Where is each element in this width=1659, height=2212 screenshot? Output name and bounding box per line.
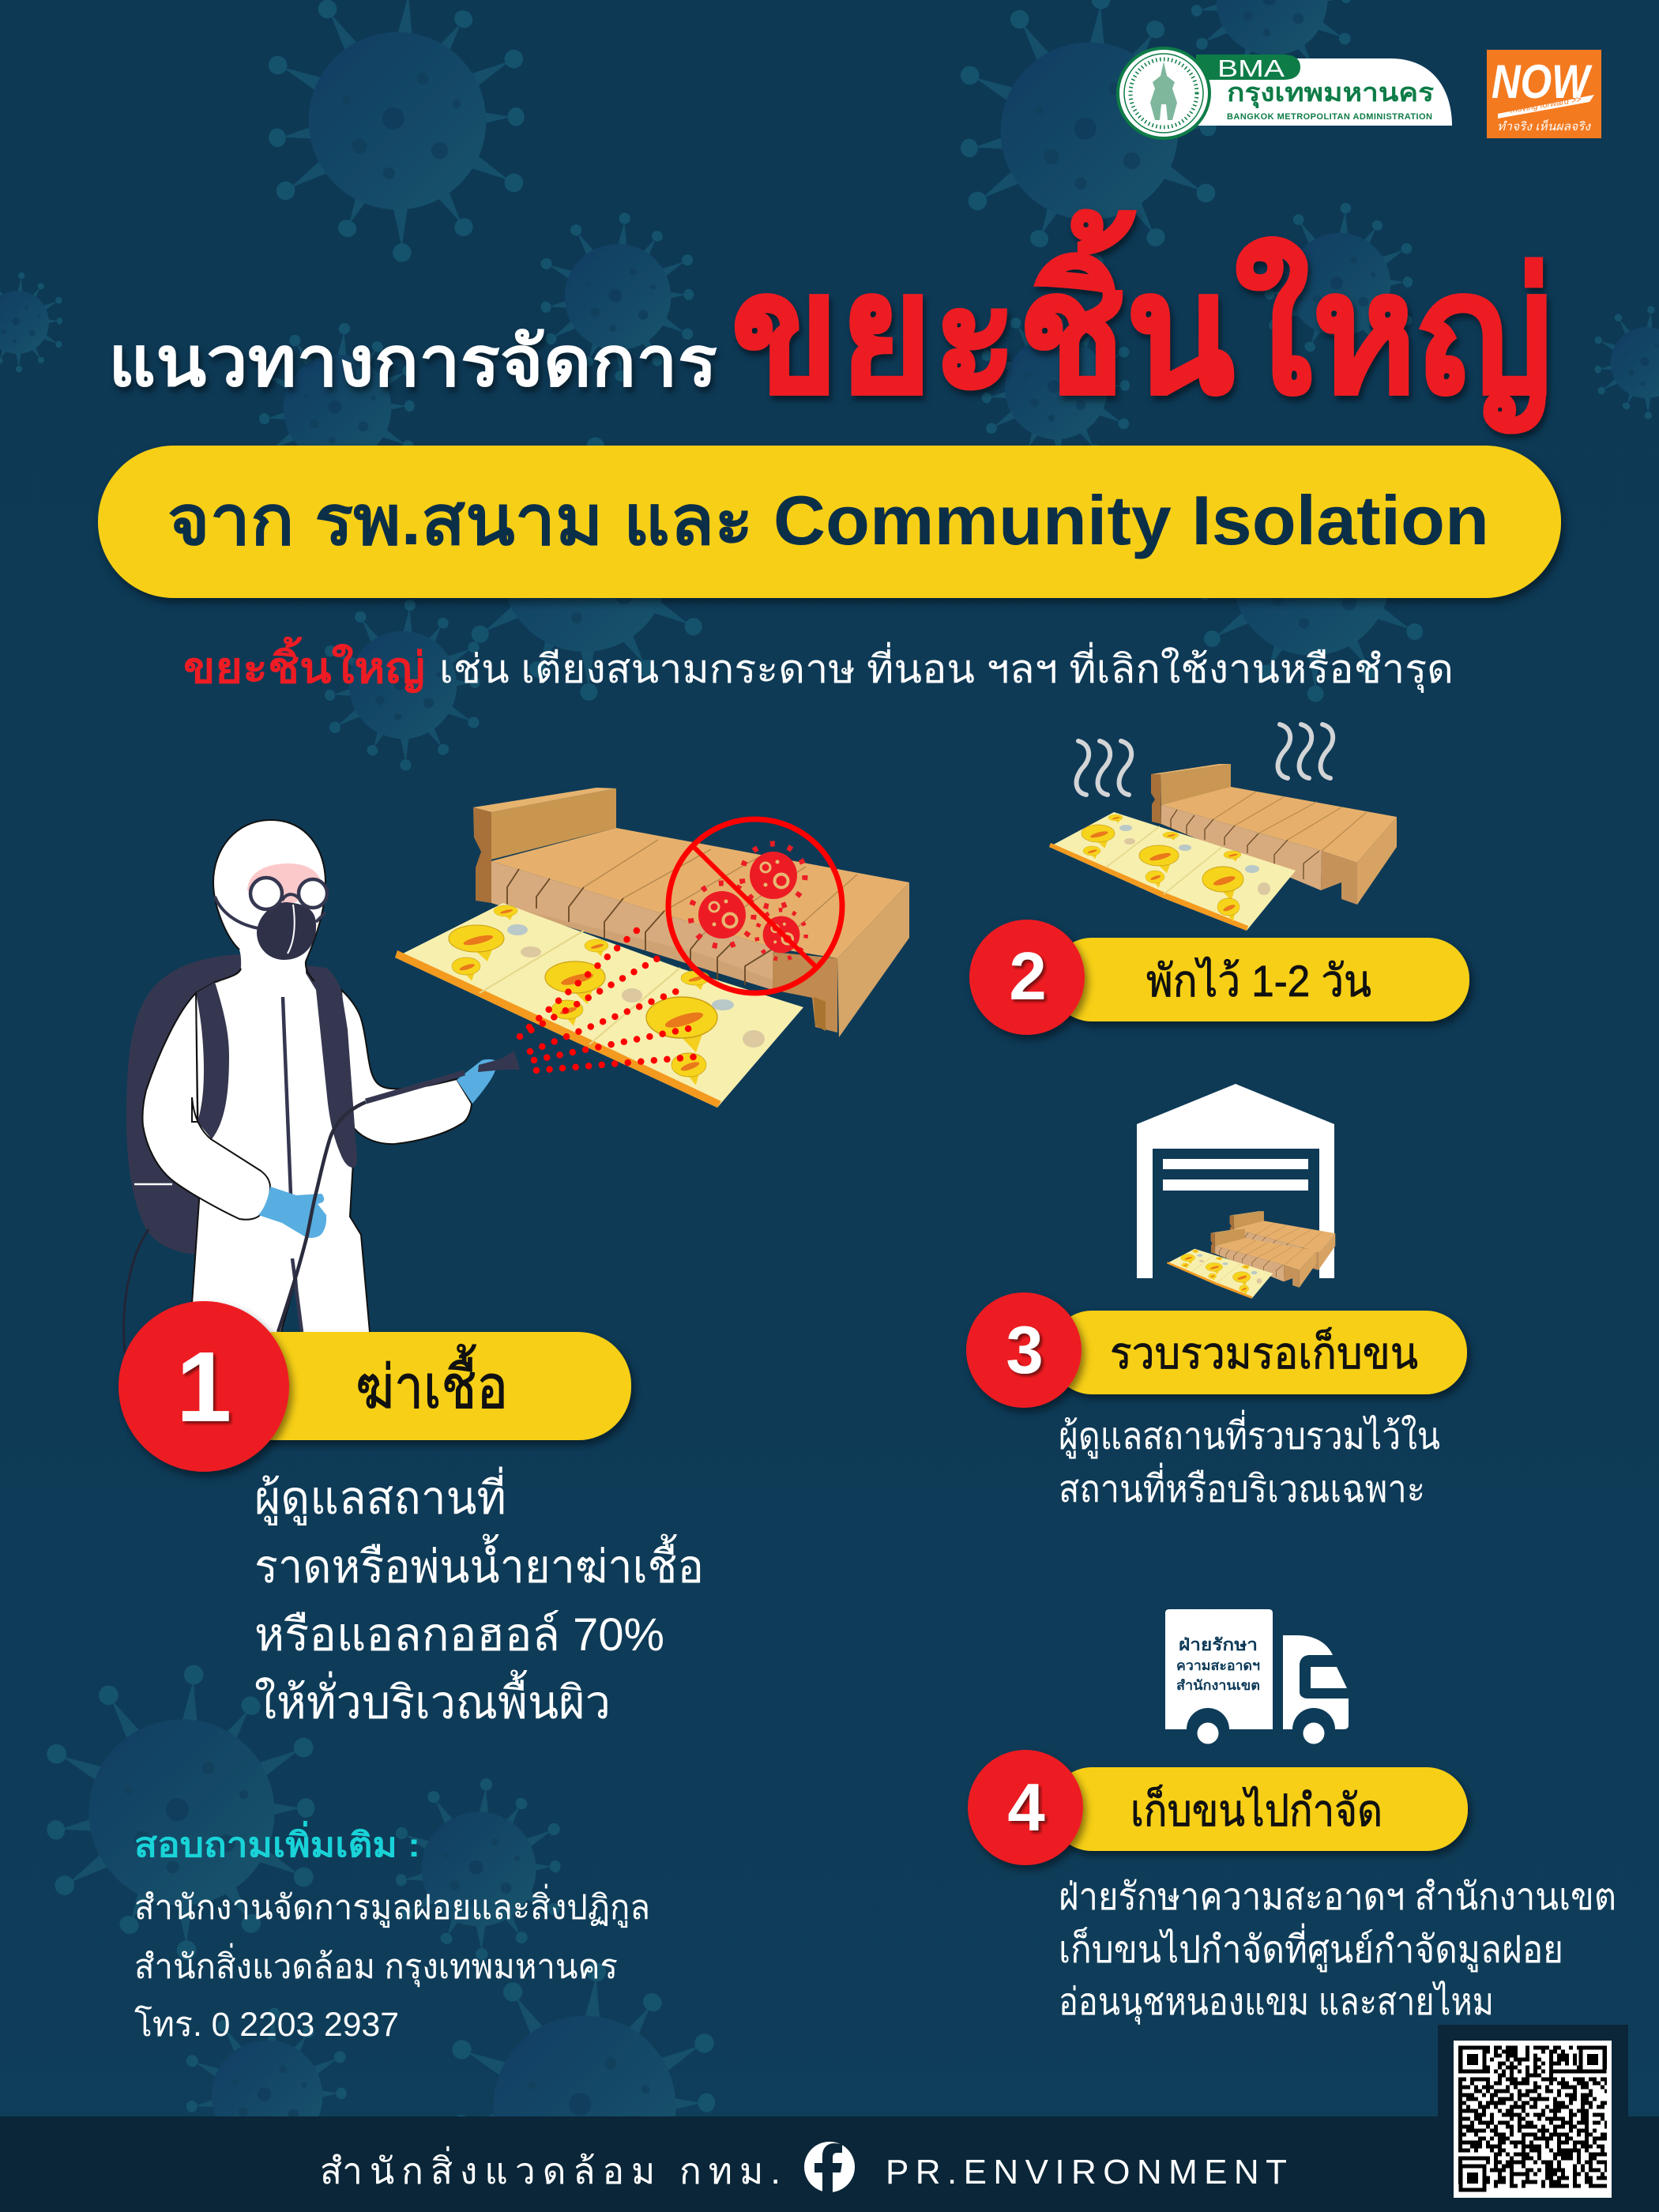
step 3 text — [1059, 1409, 1440, 1510]
worker legs and torso — [190, 966, 373, 1343]
footer text: สำนักสิ่งแวดล้อม กทม. — [320, 2146, 781, 2191]
step 4 text: เก็บขนไปกำจัดที่ศูนย์กำจัดมูลฝอย — [1059, 1923, 1563, 1973]
QR code — [1454, 2041, 1612, 2198]
worker zipper — [283, 997, 302, 1332]
step 4 text — [1059, 1876, 1616, 2025]
step 3 header: 3 — [1006, 1313, 1044, 1388]
step 3 text: ผู้ดูแลสถานที่รวบรวมไว้ใน — [1059, 1409, 1440, 1459]
step 1 header: ฆ่าเชื้อ — [356, 1344, 508, 1421]
step 1 text: หรือแอลกอฮอล์ 70% — [254, 1609, 664, 1661]
step 3 text: สถานที่หรือบริเวณเฉพาะ — [1059, 1462, 1425, 1510]
icon: garbage truck — [1165, 1609, 1349, 1744]
worker head — [213, 820, 325, 982]
step 1 header — [118, 1301, 631, 1472]
subtitle pill: จาก รพ.สนาม และ Community Isolation — [167, 481, 1489, 559]
icon: no virus sign — [668, 819, 842, 993]
step 4 header: 4 — [1007, 1770, 1045, 1845]
contact information: สอบถามเพิ่มเติม : — [134, 1821, 420, 1864]
step 4 text: อ่อนนุชหนองแขม และสายไหม — [1059, 1980, 1494, 2025]
logo: BMA: BANGKOK METROPOLITAN ADMINISTRATION — [1227, 112, 1432, 122]
contact information: สำนักงานจัดการมูลฝอยและสิ่งปฏิกูล — [134, 1884, 650, 1928]
logo: NOW: ทำจริง เห็นผลจริง — [1497, 119, 1592, 134]
step 1 text: ราดหรือพ่นน้ำยาฆ่าเชื้อ — [254, 1534, 704, 1593]
footer band — [0, 2025, 1659, 2212]
steam — [1077, 724, 1333, 795]
step 1 text: ให้ทั่วบริเวณพื้นผิว — [254, 1670, 611, 1729]
definition text: เช่น เตียงสนามกระดาษ ที่นอน ฯลฯ ที่เลิกใช้งานหรือชำรุด — [439, 642, 1454, 693]
illustration: mattress — [395, 903, 803, 1108]
title — [108, 209, 1552, 433]
worker gloved hand — [258, 1187, 326, 1238]
logo: NOW — [1487, 50, 1601, 138]
icon: garbage truck: ความสะอาดฯ — [1176, 1658, 1260, 1673]
worker left strap — [196, 982, 229, 1139]
logo: BMA: กรุงเทพมหานคร — [1227, 78, 1434, 109]
logo: BMA — [1118, 48, 1452, 138]
worker hose and sprayer — [366, 1073, 465, 1101]
step 3 header: รวบรวมรอเก็บขน — [1110, 1326, 1418, 1378]
illustration: main cardboard bed — [473, 788, 909, 1037]
title: ขยะชิ้นใหญ่ — [731, 209, 1552, 433]
worker right arm — [341, 990, 472, 1144]
contact information: สำนักสิ่งแวดล้อม กรุงเทพมหานคร — [134, 1943, 618, 1988]
logo: NOW: moving forward >> — [1510, 95, 1582, 115]
title: แนวทางการจัดการ — [108, 322, 717, 401]
step 3 header — [966, 1292, 1467, 1408]
step 4 header — [968, 1750, 1468, 1865]
logo: NOW: NOW — [1492, 55, 1593, 108]
step 4 text: ฝ่ายรักษาความสะอาดฯ สำนักงานเขต — [1059, 1876, 1616, 1918]
step 4 header: เก็บขนไปกำจัด — [1130, 1784, 1382, 1835]
logo: BMA: BMA — [1217, 55, 1285, 82]
footer text — [320, 2146, 1287, 2191]
icon: garbage truck: สำนักงานเขต — [1176, 1678, 1260, 1693]
illustration: bed resting — [1049, 764, 1397, 931]
worker right strap — [306, 965, 357, 1168]
spray dots — [520, 930, 694, 1070]
subtitle pill — [98, 446, 1561, 598]
icon: garbage truck: ฝ่ายรักษา — [1179, 1636, 1258, 1654]
step 2 header: 2 — [1009, 939, 1047, 1014]
contact information — [134, 1821, 650, 2044]
illustration: worker in protective suit — [124, 820, 520, 1353]
contact information: โทร. 0 2203 2937 — [134, 2005, 399, 2044]
step 2 header — [969, 920, 1469, 1035]
step 1 text: ผู้ดูแลสถานที่ — [254, 1466, 506, 1525]
step 2 header: พักไว้ 1-2 วัน — [1146, 956, 1371, 1006]
icon: garage — [1137, 1084, 1335, 1299]
step 1 text — [254, 1466, 704, 1729]
definition text — [183, 637, 1454, 693]
step 1 header: 1 — [176, 1331, 231, 1443]
worker left arm — [142, 993, 270, 1220]
definition text: ขยะชิ้นใหญ่ — [183, 637, 425, 693]
icon: facebook — [804, 2142, 855, 2192]
footer text: PR.ENVIRONMENT — [886, 2153, 1287, 2191]
worker backpack — [126, 954, 245, 1255]
